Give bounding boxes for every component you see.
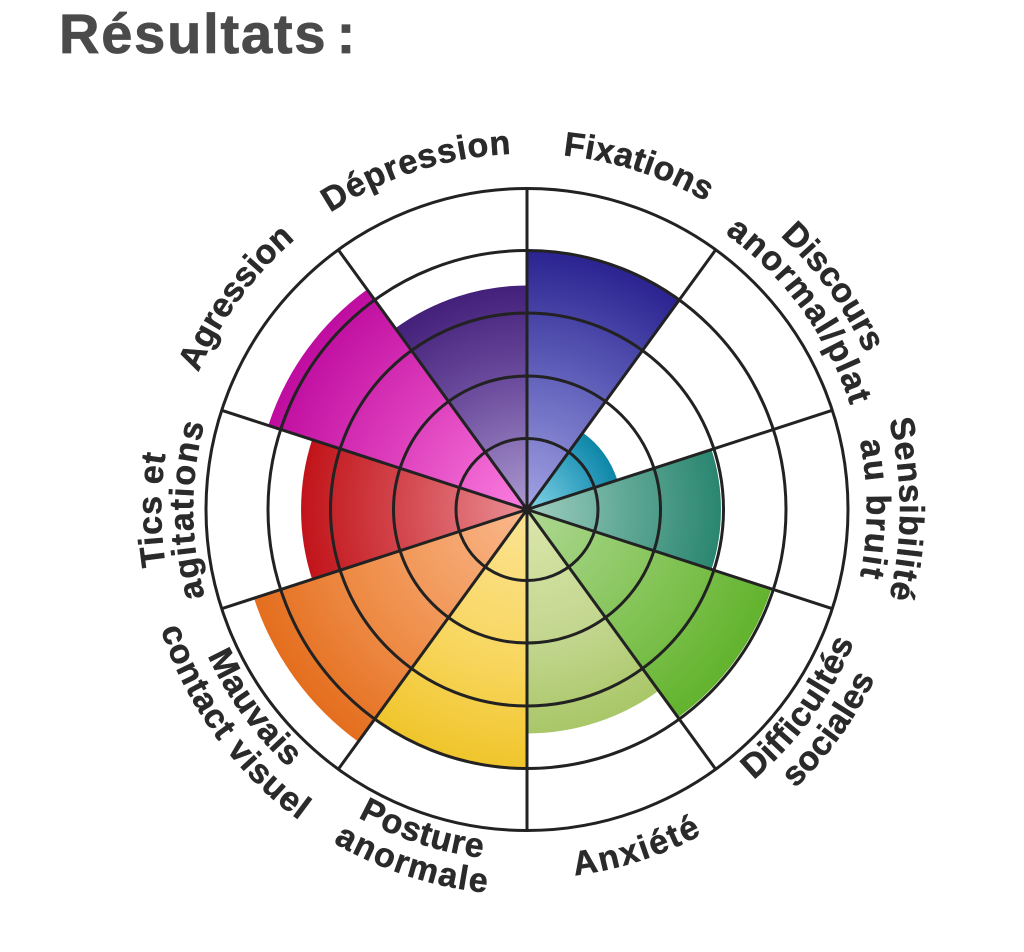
sector dividers: [222, 188, 832, 830]
label: Agression: Agression: [180, 229, 294, 372]
wedge: Dépression: [395, 286, 527, 510]
label: Anxiété: Anxiété: [575, 814, 699, 876]
label: Sensibilité au bruit: [860, 418, 926, 600]
radar wheel chart: [206, 188, 848, 830]
concentric scale rings: [206, 188, 848, 830]
label: Discours anormal/plat: Discours: [782, 220, 880, 350]
wedge: Sensibilité au bruit: [527, 450, 721, 569]
label: Fixations: Fixations: [564, 132, 712, 200]
wedge: Mauvais contact visuel: [254, 510, 527, 742]
label: Posture anormale: anormale: [335, 830, 487, 892]
wedge: Fixations: [527, 250, 679, 510]
label: Tics et agitations: Tics et: [138, 452, 166, 568]
label: Sensibilité au bruit: Sensibilité: [890, 418, 926, 600]
wedge: Posture anormale: [375, 510, 527, 768]
label: Tics et agitations: [138, 422, 206, 598]
title: Résultats :: [59, 2, 357, 65]
label: Sensibilité au bruit: au bruit: [860, 440, 892, 580]
label: Difficultés sociales: sociales: [786, 674, 873, 786]
wedge: Tics et agitations: [301, 440, 527, 579]
label: Mauvais contact visuel: Mauvais: [208, 646, 298, 765]
label: Discours anormal/plat: anormal/plat: [727, 222, 870, 406]
wedge: Anxiété: [527, 510, 659, 734]
centre hub: [522, 504, 532, 514]
wedge: Agression: [268, 290, 527, 510]
label: Posture anormale: Posture: [360, 797, 483, 858]
label: Difficultés sociales: Difficultés: [739, 638, 852, 779]
wedge: Difficultés sociales: [527, 510, 771, 717]
label: Mauvais contact visuel: contact visuel: [162, 626, 312, 820]
label: Tics et agitations: agitations: [168, 422, 206, 598]
wedge: Discours anormal/plat: [527, 433, 617, 510]
label: Posture anormale: [335, 797, 487, 892]
label: Dépression: Dépression: [320, 134, 510, 212]
